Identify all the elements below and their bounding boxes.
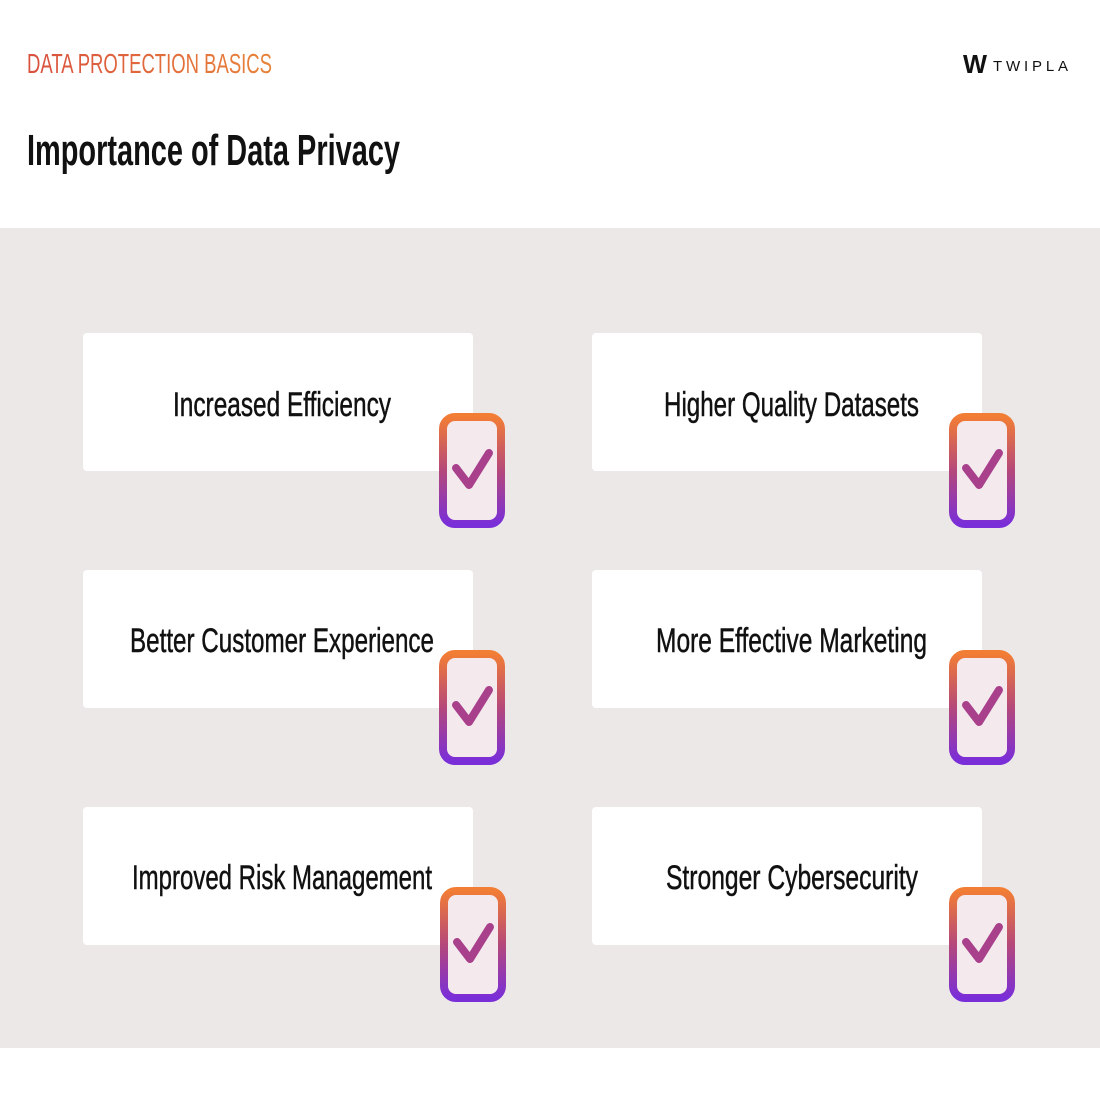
title: Importance of Data Privacy [27,126,400,175]
card: Stronger Cybersecurity [592,807,1011,998]
logo: W [963,49,987,79]
background panel [0,228,1100,1048]
logo: TWIPLA [993,58,1068,75]
card: Improved Risk Management [83,807,502,998]
card: Better Customer Experience: Better Customer Experience [130,622,434,660]
card: Increased Efficiency: Increased Efficiency [173,386,391,424]
card: Higher Quality Datasets: Higher Quality Datasets [664,386,919,424]
card: Better Customer Experience [83,570,501,761]
card: Stronger Cybersecurity: Stronger Cybersecurity [666,859,918,897]
header label: DATA PROTECTION BASICS [27,48,272,79]
card: More Effective Marketing [592,570,1011,761]
card: Higher Quality Datasets [592,333,1011,524]
logo [963,49,1068,79]
card: More Effective Marketing: More Effective Marketing [656,622,927,660]
card: Increased Efficiency [83,333,501,524]
card: Improved Risk Management: Improved Risk Management [132,859,432,897]
